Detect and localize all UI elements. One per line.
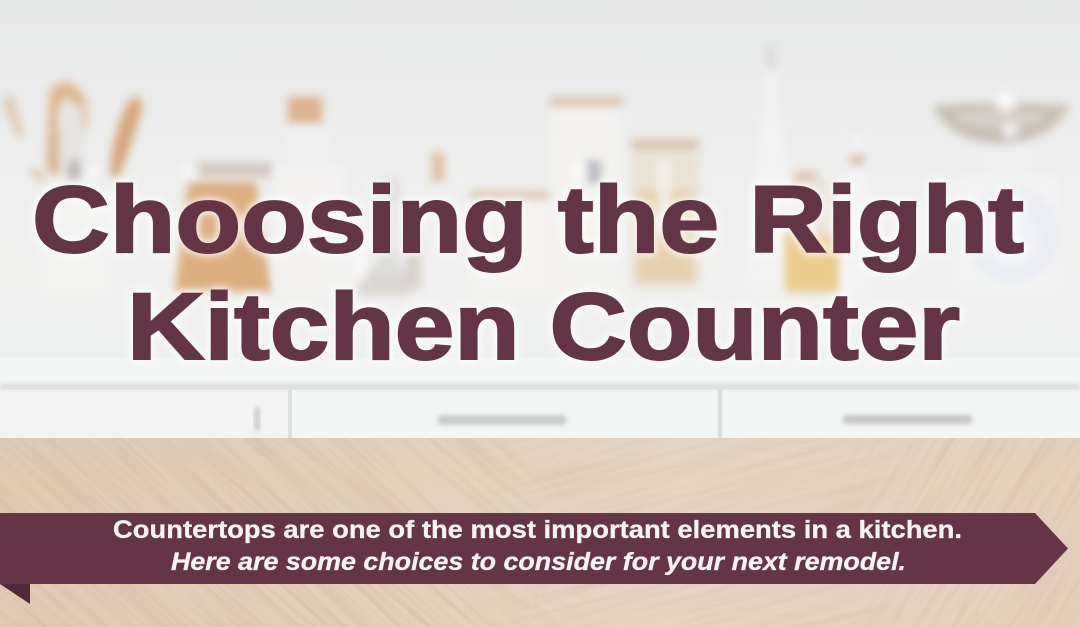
canisters xyxy=(470,98,622,295)
ribbon banner xyxy=(0,513,1068,604)
tall bottle xyxy=(748,46,796,290)
small bottle xyxy=(844,135,872,296)
ribbon text line 2: Here are some choices to consider for your next remodel. xyxy=(171,548,906,576)
title glow xyxy=(32,167,1024,380)
honey jar xyxy=(785,172,839,292)
drawer handles xyxy=(254,407,260,431)
glass jar xyxy=(632,140,700,288)
cork crate xyxy=(175,163,272,292)
title xyxy=(32,167,1024,380)
counter surface xyxy=(0,295,1080,385)
ribbon fold xyxy=(0,584,30,604)
blurred kitchen background xyxy=(0,0,1080,438)
kitchen scale xyxy=(933,91,1070,290)
bottle with square cork xyxy=(275,97,345,293)
utensils in crock xyxy=(2,82,142,293)
title glow: Choosing the Right xyxy=(32,167,1024,273)
grinders xyxy=(352,153,444,296)
counter edge and shadow xyxy=(0,358,1080,390)
cabinet drawers xyxy=(0,390,1080,438)
title line 1: Choosing the Right xyxy=(32,167,1024,273)
title line 2: Kitchen Counter xyxy=(127,274,960,380)
wood countertop xyxy=(0,438,1080,627)
ribbon text line 1: Countertops are one of the most important elements in a kitchen. xyxy=(113,516,962,544)
title glow: Kitchen Counter xyxy=(127,274,960,380)
ribbon body xyxy=(0,513,1068,584)
